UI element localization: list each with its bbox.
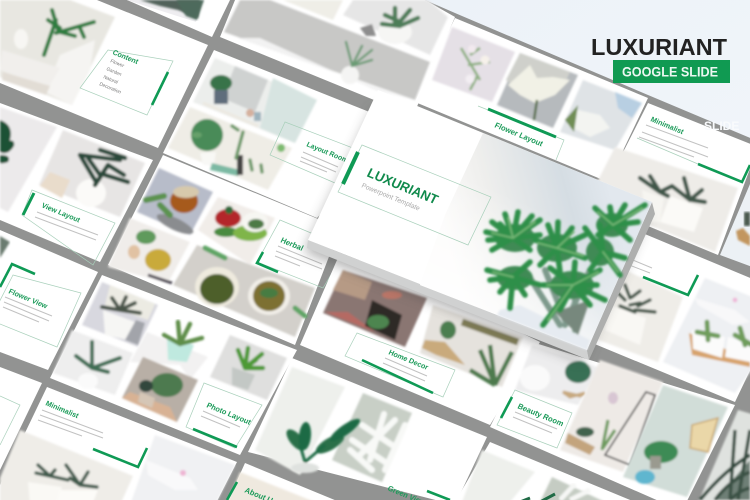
image: photo area: [420, 133, 652, 350]
text lines: [3, 297, 52, 322]
image: lavender flower: [432, 27, 515, 102]
text box: content list: [80, 48, 173, 115]
panel: luxuriant cover slide: [304, 90, 655, 362]
image: green wall: [623, 385, 728, 497]
panel: dark palm slide: [697, 410, 750, 500]
image: white blossom: [560, 80, 642, 150]
image: red room: [323, 270, 427, 347]
image: red berries: [198, 197, 275, 265]
text box: view layout: [22, 190, 115, 265]
image: teal pot: [130, 322, 208, 380]
image: white flowers: [332, 393, 412, 482]
panel: green view slide: [248, 358, 487, 500]
watermark text: SLIDE: [704, 119, 739, 133]
image: large leaf plant: [0, 107, 57, 212]
text lines: [35, 212, 98, 240]
heading: Flower Layout: Flower Layout: [493, 121, 545, 148]
panel: about us slide: [225, 463, 342, 500]
title: LUXURIANT: LUXURIANT: [591, 34, 728, 60]
text box: herbal: [257, 220, 347, 288]
panel: top middle slide: [220, 0, 455, 116]
panel: flower layout slide: [415, 18, 648, 182]
heading: Minimalist: Minimalist: [44, 399, 81, 420]
icon: leafy plant: [283, 416, 363, 473]
slide face: [308, 90, 652, 350]
badge: GOOGLE SLIDE: [613, 60, 730, 83]
text box: cover title: [338, 145, 491, 245]
panel: pale picture at right edge: [720, 165, 750, 268]
subtitle: Powerpoint Template: [360, 182, 421, 213]
list: content items: Decoration: [98, 81, 122, 96]
list: content items: Flower: [109, 58, 125, 69]
panel: herbal slide: [108, 155, 347, 345]
image: lamp: [515, 345, 600, 405]
text lines: [201, 411, 240, 428]
badge: GOOGLE SLIDE: GOOGLE SLIDE: [622, 64, 718, 80]
pot: [497, 305, 590, 350]
text box: beauty room: [497, 390, 572, 448]
green corner: [643, 275, 698, 295]
image: striped plant: [53, 330, 133, 395]
panel: layout room slide: [163, 50, 400, 218]
text: minimalist heading: Minimalist: [649, 115, 686, 136]
image: tea cup: [137, 168, 213, 238]
text box bar: [698, 164, 750, 182]
panel: home decor slide: [300, 260, 540, 425]
image: green plant gray pot: [210, 335, 287, 400]
panel: minimalist slide top right: [588, 103, 750, 255]
image: two cups of tea: [173, 245, 315, 337]
text lines: [513, 412, 557, 433]
text lines: [275, 246, 322, 269]
panel: flower view slide: [0, 230, 98, 370]
heading: Flower View: Flower View: [7, 287, 49, 311]
image: white lily: [497, 53, 578, 128]
list: content items: [98, 58, 125, 96]
image: plants on pale ground: [585, 270, 683, 362]
image: room with shelves: [560, 360, 663, 472]
image: two white pots: [588, 147, 738, 252]
heading: View Layout: View Layout: [40, 202, 82, 225]
text lines: [38, 410, 103, 438]
soft shadow: [304, 107, 648, 362]
image: white books: [130, 435, 235, 500]
panel: top slide with dark leaves: [127, 0, 230, 37]
text box: photo layout: [186, 383, 262, 448]
image: top pale pictures: [283, 0, 448, 55]
image: wood table plants: [122, 357, 198, 422]
heading: Photo Layout: Photo Layout: [205, 401, 253, 427]
text lines: [300, 152, 338, 172]
image: shelf with grid wall: [193, 58, 317, 143]
slide edge: [587, 202, 655, 360]
heading: Content: Content: [111, 48, 141, 66]
list: content items: Natural: [102, 74, 119, 86]
image: plant on shelf: [39, 130, 145, 217]
text box: green view: [386, 484, 450, 500]
image: shelf with plant: [168, 107, 292, 190]
plant: succulent: [486, 205, 645, 335]
panel: bottom center slide: [455, 442, 635, 500]
heading: Herbal: Herbal: [279, 236, 305, 253]
panel: photo layout slide: [50, 275, 297, 455]
heading: LUXURIANT: LUXURIANT: [365, 165, 441, 207]
image: oil bottle: [108, 218, 190, 283]
image: pale wall: [255, 367, 345, 475]
list: content items: Garden: [105, 66, 123, 78]
green bar: [343, 152, 358, 184]
panel: minimalist slide lower left: [0, 387, 237, 500]
panel: content slide: [0, 0, 208, 148]
text lines: [639, 125, 708, 157]
text box: flower layout: [478, 106, 564, 160]
text lines: [383, 358, 427, 381]
panel: view layout slide: [0, 103, 153, 265]
image: books and pots: [663, 278, 750, 393]
panel: minimalist slide mid right: [585, 232, 750, 402]
image: two white pots: [0, 430, 133, 500]
heading: Home Decor: Home Decor: [387, 348, 430, 372]
heading: Layout Room: Layout Room: [305, 141, 349, 165]
text box: layout room: [270, 122, 353, 183]
text box: home decor: [345, 333, 455, 397]
image: gray bed with plant: [224, 0, 430, 100]
green corner: [93, 448, 147, 467]
image: plant shelf room: [420, 305, 523, 387]
image: pot by window: [82, 282, 158, 347]
text lines: [624, 258, 652, 273]
image: bedroom with branch: [0, 0, 115, 105]
panel: beauty room slide: [490, 342, 735, 500]
heading: Beauty Room: Beauty Room: [516, 402, 565, 428]
panel: left edge slide: [0, 367, 42, 470]
